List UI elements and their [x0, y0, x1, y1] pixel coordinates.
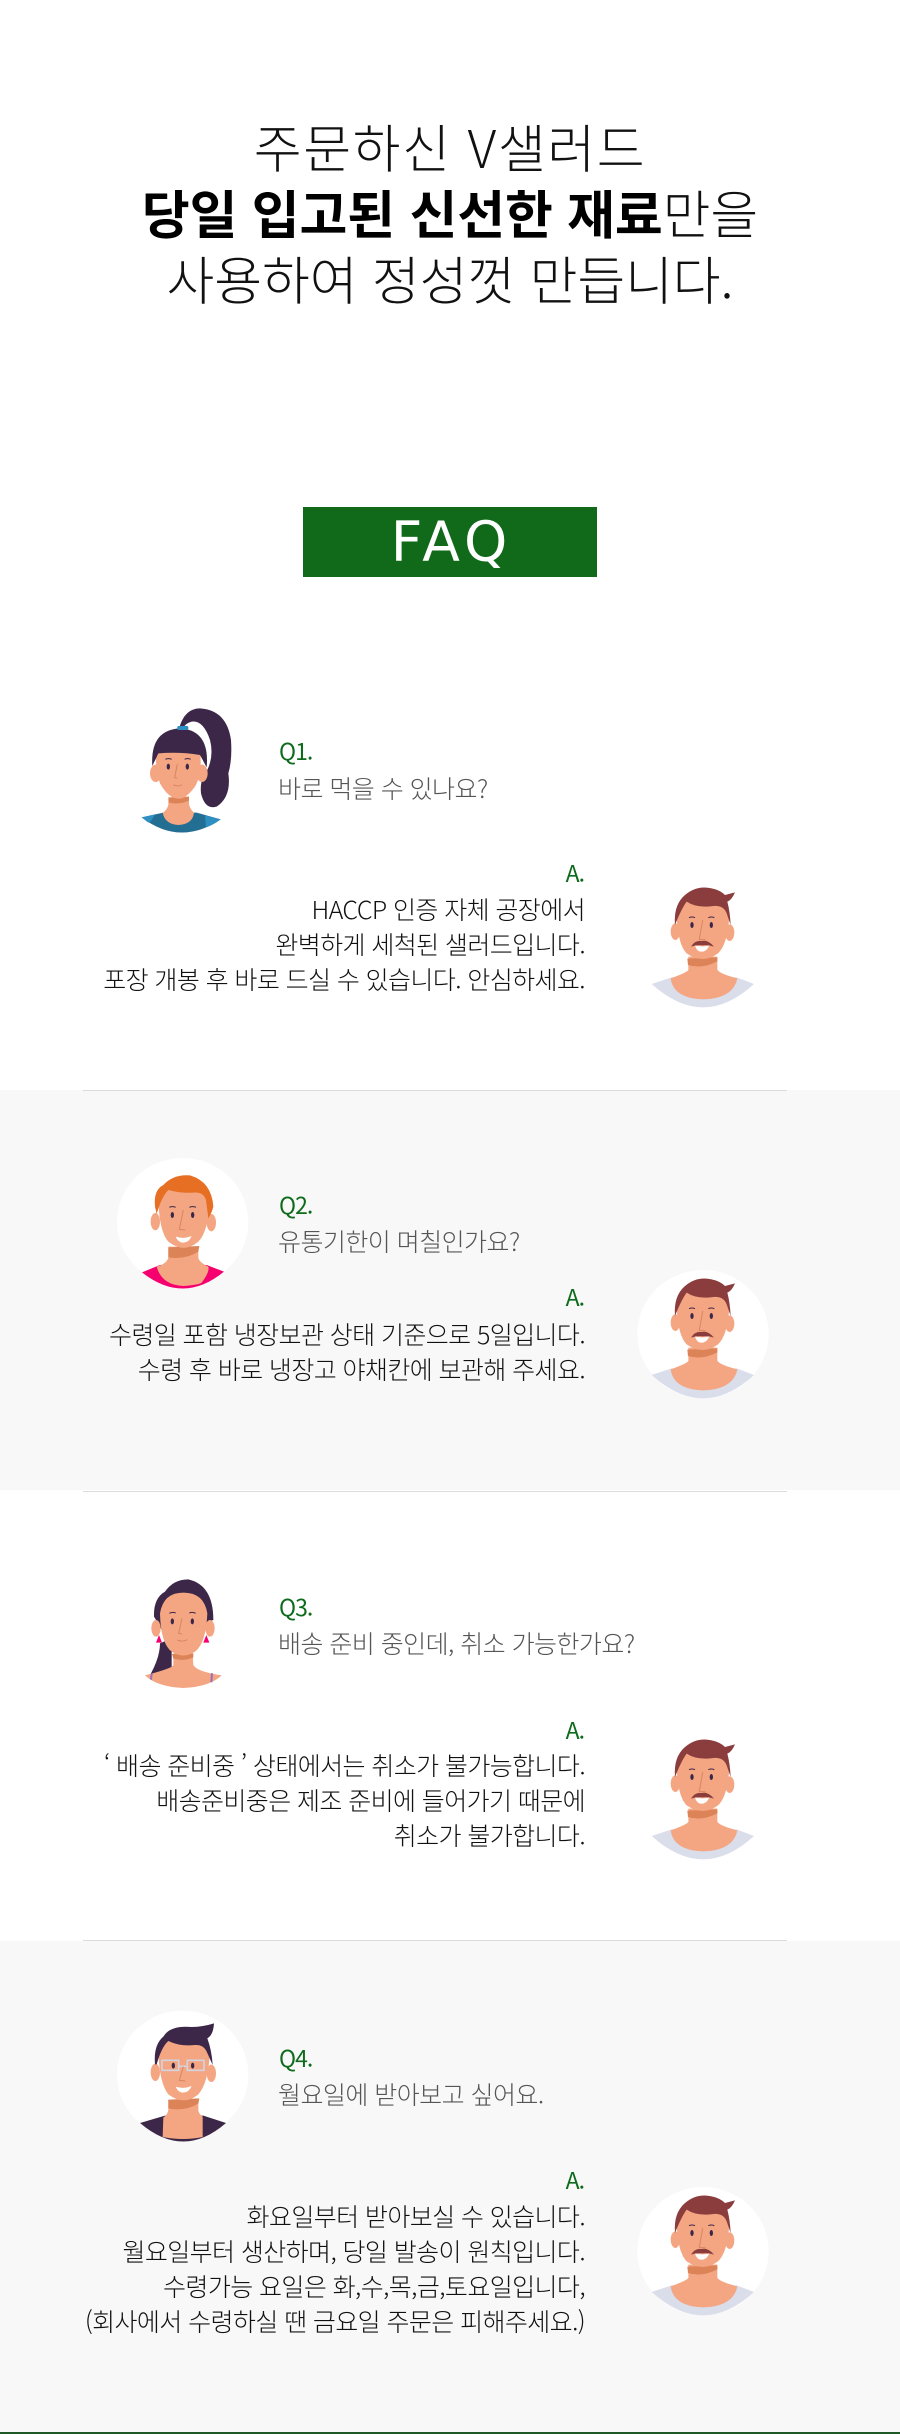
answer 3 text: 배송준비중은 제조 준비에 들어가기 때문에	[156, 1782, 585, 1818]
answer 2 label: A.	[566, 1279, 584, 1313]
icon: customer avatar 2 (orange hair)	[142, 1175, 224, 1288]
icon: customer avatar 3 (woman with earrings)	[145, 1579, 222, 1688]
question 3 text: 배송 준비 중인데, 취소 가능한가요?	[278, 1625, 635, 1661]
answer 2 text: 수령 후 바로 냉장고 야채칸에 보관해 주세요.	[138, 1351, 585, 1387]
answer 4 text	[85, 2198, 585, 2339]
panel: band question 2	[0, 1090, 900, 1490]
FAQ badge: FAQ	[391, 510, 512, 574]
panel: band question 4	[0, 1941, 900, 2432]
answer 4 label: A.	[566, 2162, 584, 2196]
title: 주문하신 V샐러드	[254, 108, 646, 183]
question 2 label: Q2.	[279, 1187, 312, 1221]
answer 4 text: (회사에서 수령하실 땐 금요일 주문은 피해주세요.)	[85, 2303, 585, 2339]
question 4 text: 월요일에 받아보고 싶어요.	[278, 2076, 544, 2112]
answer 3 text: 취소가 불가합니다.	[394, 1817, 585, 1853]
answer 2 text: 수령일 포함 냉장보관 상태 기준으로 5일입니다.	[109, 1316, 585, 1352]
title: 당일 입고된 신선한 재료만을	[142, 174, 758, 249]
answer 1 text: 완벽하게 세척된 샐러드입니다.	[275, 926, 585, 962]
icon: customer avatar 1 (ponytail woman)	[142, 708, 232, 832]
answer 4 text: 수령가능 요일은 화,수,목,금,토요일입니다,	[163, 2268, 585, 2304]
answer 4 text: 월요일부터 생산하며, 당일 발송이 원칙입니다.	[122, 2233, 585, 2269]
icon: staff avatar 2	[652, 1278, 754, 1398]
answer 3 text: ‘ 배송 준비중 ’ 상태에서는 취소가 불가능합니다.	[104, 1747, 585, 1783]
question 3 label: Q3.	[279, 1589, 312, 1623]
question 4 label: Q4.	[279, 2040, 312, 2074]
FAQ badge	[303, 507, 597, 577]
answer 2 text	[109, 1316, 585, 1387]
answer 1 label: A.	[566, 855, 584, 889]
answer 3 label: A.	[566, 1712, 584, 1746]
icon: staff avatar 4	[652, 2196, 754, 2316]
icon: staff avatar 3	[652, 1740, 754, 1860]
icon: customer avatar 4 (man with glasses)	[140, 2023, 226, 2142]
answer 1 text	[103, 891, 585, 997]
answer 1 text: 포장 개봉 후 바로 드실 수 있습니다. 안심하세요.	[103, 961, 585, 997]
title: 사용하여 정성껏 만듭니다.	[166, 240, 734, 315]
answer 3 text	[104, 1747, 585, 1853]
icon: staff avatar 1	[652, 888, 754, 1008]
question 1 text: 바로 먹을 수 있나요?	[278, 770, 488, 806]
answer 1 text: HACCP 인증 자체 공장에서	[311, 891, 585, 927]
question 2 text: 유통기한이 며칠인가요?	[278, 1223, 520, 1259]
question 1 label: Q1.	[279, 733, 312, 767]
answer 4 text: 화요일부터 받아보실 수 있습니다.	[247, 2198, 585, 2234]
title	[142, 108, 758, 315]
